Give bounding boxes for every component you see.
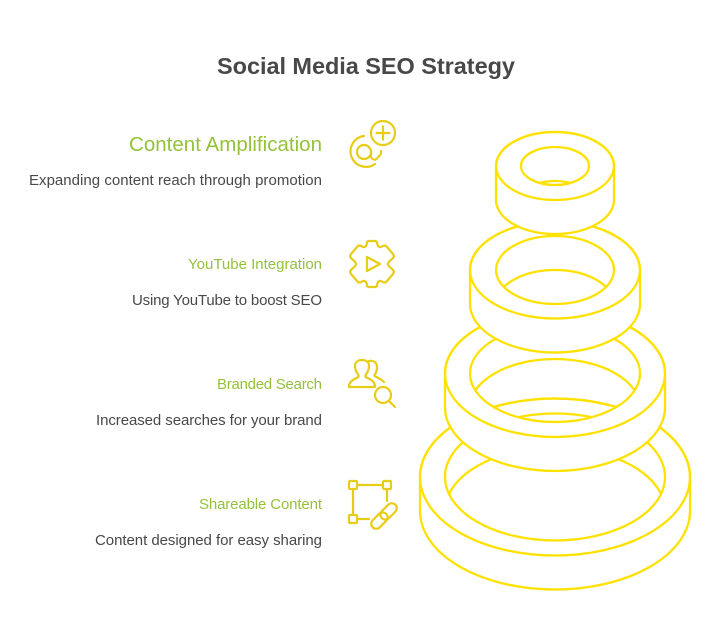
stacked rings diagram [420,132,690,590]
description: Increased searches for your brand [96,412,322,429]
ring 4: shareable content base [420,398,690,590]
heading: Branded Search [217,376,322,393]
heading: Shareable Content [199,496,323,513]
description: Using YouTube to boost SEO [132,292,322,309]
ring 1: content amplification top [496,132,614,234]
title: Social Media SEO Strategy [217,53,515,79]
description: Content designed for easy sharing [95,532,322,549]
description: Expanding content reach through promotion [29,172,322,189]
heading: Content Amplification [129,133,322,156]
icon: at sign with plus [351,121,395,167]
item: shareable content [95,496,323,549]
ring 2: youtube integration [470,221,640,352]
item: youtube integration [132,256,322,309]
item: branded search [96,376,322,429]
icon: users with magnifier [349,360,395,407]
heading: YouTube Integration [188,256,322,273]
icon: frame with link [349,481,399,531]
icon: gear with play [350,241,394,287]
ring 3: branded search [445,310,665,471]
item: content amplification [29,133,322,189]
